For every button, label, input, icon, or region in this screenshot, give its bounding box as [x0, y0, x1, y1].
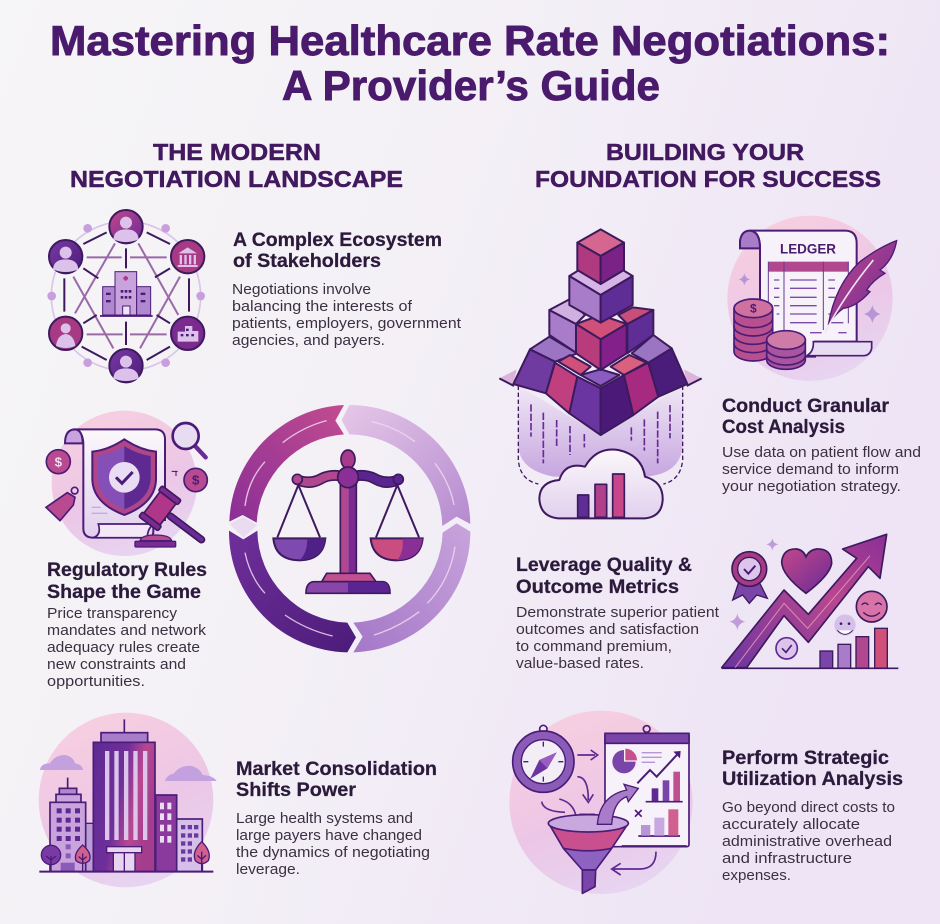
- text: a complex ecosystem of stakeholders: of Stakeholders: [233, 251, 381, 272]
- text: perform strategic utilization analysis: Perform Strategic: [722, 748, 889, 769]
- icon: stacked blocks foundation with data cloud: [499, 229, 702, 518]
- heading: building your foundation for success: [535, 139, 881, 192]
- text: market consolidation shifts power: large payers have changed: [236, 828, 422, 844]
- left building: [50, 788, 86, 872]
- text: a complex ecosystem of stakeholders: Negotiations involve: [232, 282, 371, 298]
- icon: regulatory scroll, shield and gavel: $: [192, 473, 200, 488]
- text: market consolidation shifts power: Shifts Power: [236, 780, 357, 801]
- compass: [513, 725, 574, 792]
- balance scale: [273, 450, 423, 593]
- text: conduct granular cost analysis: Use data on patient flow and: [722, 445, 921, 461]
- text: perform strategic utilization analysis: expenses.: [722, 868, 791, 884]
- ring segment: top left: [229, 405, 344, 523]
- text: a complex ecosystem of stakeholders: A Complex Ecosystem: [233, 230, 442, 251]
- heading: building your foundation for success: FOUNDATION FOR SUCCESS: [535, 166, 881, 192]
- icon: ledger with feather and coins: [727, 216, 897, 381]
- text: leverage quality and outcome metrics: Outcome Metrics: [516, 577, 679, 598]
- text: regulatory rules shape the game: new constraints and: [47, 657, 186, 673]
- text: a complex ecosystem of stakeholders: [232, 230, 461, 349]
- icon: regulatory scroll, shield and gavel: [46, 411, 216, 557]
- icon: ledger with feather and coins: $: [750, 302, 757, 316]
- icon: regulatory scroll, shield and gavel: $: [55, 454, 63, 469]
- text: market consolidation shifts power: [236, 759, 437, 878]
- text: regulatory rules shape the game: [47, 560, 207, 690]
- icon: compass, funnel and analytics board: [509, 711, 693, 894]
- title: A Provider’s Guide: [282, 62, 660, 109]
- text: perform strategic utilization analysis: Utilization Analysis: [722, 769, 903, 790]
- heading: the modern negotiation landscape: [70, 139, 403, 192]
- text: conduct granular cost analysis: your negotiation strategy.: [722, 479, 901, 495]
- text: conduct granular cost analysis: service demand to inform: [722, 462, 899, 478]
- text: leverage quality and outcome metrics: outcomes and satisfaction: [516, 622, 699, 638]
- right buildings: [156, 795, 202, 872]
- text: perform strategic utilization analysis: accurately allocate: [722, 817, 860, 833]
- text: a complex ecosystem of stakeholders: balancing the interests of: [232, 299, 413, 315]
- cloud with bars: [539, 450, 663, 518]
- icon: balance scale in circular ring: [229, 405, 470, 652]
- text: market consolidation shifts power: leverage.: [236, 862, 300, 878]
- title: [50, 17, 890, 109]
- text: conduct granular cost analysis: Cost Analysis: [722, 417, 845, 438]
- text: market consolidation shifts power: Market Consolidation: [236, 759, 437, 780]
- text: market consolidation shifts power: Large health systems and: [236, 811, 413, 827]
- text: perform strategic utilization analysis: Go beyond direct costs to: [722, 800, 895, 816]
- text: perform strategic utilization analysis: and infrastructure: [722, 851, 852, 867]
- icon: market consolidation city skyline: [39, 713, 217, 887]
- text: conduct granular cost analysis: Conduct Granular: [722, 396, 890, 417]
- text: market consolidation shifts power: the dynamics of negotiating: [236, 845, 430, 861]
- text: leverage quality and outcome metrics: [516, 555, 719, 672]
- ring segment: top right: [342, 405, 470, 526]
- ring segment: bottom left: [229, 531, 356, 652]
- scale beam: [292, 471, 403, 487]
- coin stacks: [734, 299, 805, 369]
- analytics board: [605, 726, 689, 847]
- trees: [41, 842, 209, 872]
- central tower: [101, 733, 148, 743]
- text: perform strategic utilization analysis: [722, 748, 903, 884]
- text: leverage quality and outcome metrics: Leverage Quality &: [516, 555, 692, 576]
- blocks: [513, 229, 687, 435]
- text: leverage quality and outcome metrics: to command premium,: [516, 639, 672, 655]
- text: regulatory rules shape the game: adequacy rules create: [47, 640, 200, 656]
- title: Mastering Healthcare Rate Negotiations:: [50, 17, 890, 64]
- icon: ledger with feather and coins: LEDGER: [780, 241, 836, 256]
- text: a complex ecosystem of stakeholders: patients, employers, government: [232, 316, 461, 332]
- heading: the modern negotiation landscape: THE MODERN: [153, 139, 321, 165]
- text: perform strategic utilization analysis: administrative overhead: [722, 834, 892, 850]
- ring segment: bottom right: [353, 523, 470, 652]
- text: a complex ecosystem of stakeholders: agencies, and payers.: [232, 333, 385, 349]
- text: regulatory rules shape the game: Price transparency: [47, 606, 178, 622]
- text: leverage quality and outcome metrics: value-based rates.: [516, 656, 644, 672]
- text: regulatory rules shape the game: Shape the Game: [47, 582, 201, 603]
- heading: the modern negotiation landscape: NEGOTIATION LANDSCAPE: [70, 166, 403, 192]
- funnel: [548, 815, 628, 893]
- text: regulatory rules shape the game: Regulatory Rules: [47, 560, 207, 581]
- text: conduct granular cost analysis: [722, 396, 921, 495]
- heading: building your foundation for success: BUILDING YOUR: [606, 139, 804, 165]
- text: regulatory rules shape the game: opportunities.: [47, 674, 145, 690]
- text: regulatory rules shape the game: mandates and network: [47, 623, 207, 639]
- icon: stakeholder network: [47, 210, 205, 382]
- icon: rising arrow with heart, rosette and bars: [722, 534, 898, 668]
- flow arrows: [542, 750, 687, 875]
- text: leverage quality and outcome metrics: Demonstrate superior patient: [516, 605, 719, 621]
